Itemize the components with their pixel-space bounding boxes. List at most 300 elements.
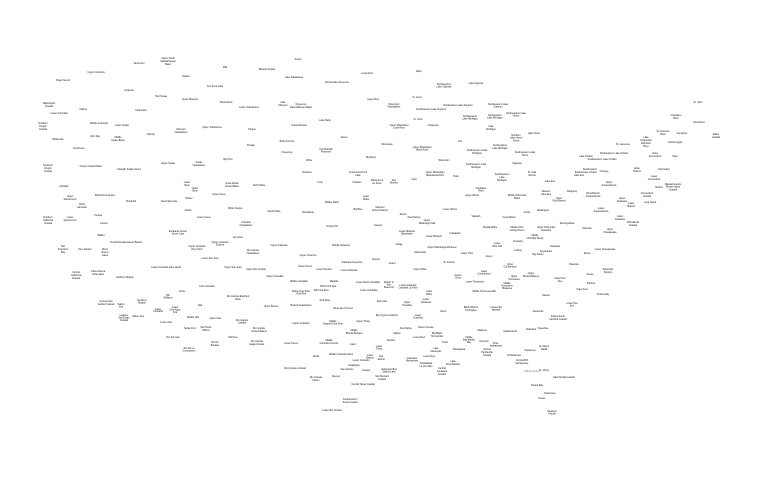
labels: Southwest: Salton <box>118 303 124 306</box>
labels: California and Great Basin: Lahontan <box>77 206 88 209</box>
labels: Ohio and Upper Mississippi valley: Osage <box>395 243 403 246</box>
labels: Great Plains north: Tongue <box>248 128 257 131</box>
labels: Central Plains and Rockies: Grand-Chariton <box>372 209 389 212</box>
labels: Pacific Northwest: Upper Columbia <box>87 71 105 74</box>
labels: Southeast: Mobile <box>465 336 473 339</box>
labels: Central Plains and Rockies: Arkansas-Keystone <box>342 261 363 264</box>
labels: Southwest: Fria <box>173 311 178 314</box>
labels: Texas and Red River: Llano <box>350 343 357 346</box>
labels: Great Plains north: Upper Red <box>367 98 379 101</box>
labels: Southeast: Tombigbee <box>465 309 478 312</box>
labels: Ohio and Upper Mississippi valley: Upper <box>507 263 513 266</box>
labels: Central Plains and Rockies: Upper San Juan <box>224 266 242 269</box>
labels: Southeast: Ochlockonee <box>507 354 522 357</box>
labels: Great Lakes: Superior <box>493 106 503 109</box>
labels: Ohio and Upper Mississippi valley: Kanawha <box>541 229 552 232</box>
labels: California and Great Basin: Upper Colorado <box>189 245 205 248</box>
labels: Southeast: Florida <box>548 412 556 415</box>
labels: Pacific Northwest: Headwaters <box>193 164 206 167</box>
labels: Southeast <box>419 290 575 415</box>
labels: Ohio and Upper Mississippi valley <box>395 171 568 290</box>
labels: Ohio and Upper Mississippi valley: Upper Illinois <box>465 194 480 197</box>
labels: Texas and Red River: Lower Rio Grande <box>322 409 342 412</box>
labels: Southeast: Alabama <box>477 329 487 332</box>
labels: Central Plains and Rockies <box>212 171 418 289</box>
labels: Pacific Northwest: Oregon <box>44 167 53 170</box>
labels: Pacific Northwest: Missouri <box>177 128 185 131</box>
labels: Northeast: Hudson <box>633 170 642 173</box>
labels: Ohio and Upper Mississippi valley: Upper <box>556 197 562 200</box>
labels: Southeast: Suwannee <box>524 349 536 352</box>
labels: Northeast: Lake Erie <box>574 174 585 177</box>
labels: Southeast: lapoosa <box>492 308 501 311</box>
labels: Texas and Red River: Galveston Bay <box>381 368 397 371</box>
labels: Northeast: Merrimack <box>658 168 670 171</box>
labels: Northeast: Coastal <box>643 195 652 198</box>
labels: Ohio and Upper Mississippi valley: Rock <box>453 175 460 178</box>
labels: Pacific Northwest: Marias <box>182 75 190 78</box>
labels: Great Lakes: Wisconsin <box>389 103 399 106</box>
labels: Southeast: Lower Red <box>423 355 435 358</box>
labels: Southeast: Choc- <box>493 342 499 345</box>
labels: Northeast: Chesapeake <box>603 231 617 234</box>
labels: Great Plains north: Big Sioux <box>366 156 377 159</box>
labels: Southwest: Mimbres <box>228 336 238 339</box>
labels: Southwest: Ventura-San <box>99 300 113 303</box>
labels: Central Plains and Rockies: Colorado <box>241 221 251 224</box>
labels: Southwest: Rio De <box>211 341 219 344</box>
labels: California and Great Basin: North <box>79 203 85 206</box>
labels: Pacific Northwest: Saskatchewan <box>160 60 176 63</box>
labels: Ohio and Upper Mississippi valley: Middle <box>503 282 511 285</box>
labels: Pacific Northwest: Basin <box>165 63 172 66</box>
labels: Great Plains north: Powder <box>247 144 255 147</box>
labels: Northeast: Penobscot <box>693 121 705 124</box>
labels: Texas and Red River: Ouachita <box>413 317 423 320</box>
labels: Northeast: Androscoggin <box>668 141 683 144</box>
labels: Texas and Red River: Middle <box>329 320 337 323</box>
labels: Great Lakes: Northeastern Lake Superior <box>443 104 473 107</box>
labels: Ohio and Upper Mississippi valley: Ohio-Salt <box>492 245 502 248</box>
labels: Northeast: Pamlico <box>587 282 596 285</box>
labels: Texas and Red River: Nueces <box>332 375 341 378</box>
labels: Great Lakes: St. Louis <box>412 96 422 99</box>
labels: Pacific Northwest: Hart Snake <box>155 95 168 98</box>
labels: Pacific Northwest: Middle Columbia <box>90 122 109 125</box>
labels: Ohio and Upper Mississippi valley: Lower Ohio <box>461 252 474 255</box>
labels: California and Great Basin: Carson <box>100 222 109 225</box>
labels: Southeast: Middle Tennessee-Elk <box>472 290 496 293</box>
labels: Ohio and Upper Mississippi valley: Lower <box>494 242 500 245</box>
labels: Southwest: Rio Grande <box>236 319 248 322</box>
labels: Great Plains north: Grand-Moreau <box>291 124 307 127</box>
labels: Northeast: Rhode Island <box>666 186 681 189</box>
labels: Great Lakes: Lake Huron <box>510 137 523 140</box>
labels: Central Plains and Rockies: Missouri-Lit <box>371 179 383 182</box>
labels: Central Plains and Rockies: Cottonwood Fork <box>349 171 367 174</box>
labels: Texas and Red River: Central Texas Coastal <box>351 383 375 386</box>
labels: Northeast: Connecticut <box>641 192 653 195</box>
labels: Northeast: St. Lawrence <box>616 143 631 146</box>
labels: Northeast: Lower <box>628 202 634 205</box>
labels: California and Great Basin: Weber <box>186 197 193 200</box>
labels: Pacific Northwest: Lower Snake <box>115 124 130 127</box>
labels: Ohio and Upper Mississippi valley: Lake <box>499 176 505 179</box>
labels: California and Great Basin: Lower San Juan <box>201 257 219 260</box>
labels: Pacific Northwest: Lower Columbia <box>50 112 68 115</box>
labels: Southwest <box>98 285 249 352</box>
labels: Great Lakes: Southeastern Lake <box>488 103 508 106</box>
labels: Southwest: Bavispe <box>211 344 220 347</box>
labels: Southeast: Coosa-Tal <box>491 306 501 309</box>
labels: Pacific Northwest <box>38 57 223 173</box>
labels: Northeast: Mid Atlantic <box>627 221 639 224</box>
labels: Southeast: Panhandle <box>481 351 493 354</box>
labels: Central Plains and Rockies: Lake <box>355 174 361 177</box>
labels: Pacific Northwest: Northern <box>38 122 48 125</box>
labels: Great Plains north: Fort Randall <box>319 148 333 151</box>
labels: Northeast: Hudson <box>655 186 664 189</box>
labels: Texas and Red River: San Antonio <box>341 368 354 371</box>
labels: Great Lakes: Huron <box>513 115 520 118</box>
labels: Ohio and Upper Mississippi valley: Iowa <box>411 178 417 181</box>
labels: California and Great Basin: Coastal <box>44 222 53 225</box>
labels: Ohio and Upper Mississippi valley: Maquoketa-Plum <box>426 174 444 177</box>
labels: Southwest: Coastal <box>120 319 129 322</box>
labels: Great Plains north: White <box>306 159 313 162</box>
labels: Great Lakes: Shore <box>513 139 520 142</box>
labels: Central Plains and Rockies: Upper Canadian <box>266 275 284 278</box>
labels: Central Plains and Rockies: Upper Rio Grande <box>246 268 266 271</box>
labels: Great Lakes: Northeastern Lake <box>506 112 526 115</box>
labels: Central Plains and Rockies: Washita <box>330 280 339 283</box>
labels: Northeast: Upper <box>652 152 658 155</box>
labels: Texas and Red River: Lower Colorado <box>353 359 370 362</box>
labels: Texas and Red River: Middle Colorado-Llano <box>329 353 354 356</box>
labels: Northeast: Susquehanna <box>594 210 609 213</box>
labels: Southwest: Southern <box>137 299 147 302</box>
labels: California and Great Basin: San Joaquin <box>78 248 92 251</box>
labels: Pacific Northwest: Oregon Closed Basin <box>80 165 103 168</box>
labels: Great Lakes: St. Croix <box>413 118 423 121</box>
labels: Great Plains north: Oahe-Missouri Basin <box>290 106 313 109</box>
labels: California and Great Basin: Central Nevada Desert Basins <box>110 241 143 244</box>
labels: Great Lakes: Lake <box>488 125 494 128</box>
labels: Pacific Northwest: Oregon <box>39 125 48 128</box>
labels: Texas and Red River: Lower Pecos <box>284 342 299 345</box>
labels: Great Plains north: Missouri <box>279 104 288 107</box>
labels: Pacific Northwest: Upper Yellowstone <box>202 126 223 129</box>
labels: Texas and Red River: North Fork Red <box>320 285 337 288</box>
labels: Ohio and Upper Mississippi valley: Kanawha <box>550 245 561 248</box>
labels: Southwest: Caballo <box>238 322 247 325</box>
labels: Southeast: Coastal <box>438 373 447 376</box>
labels: California and Great Basin: Lower <box>67 216 73 219</box>
labels: Northeast: Lower Chesapeake <box>595 248 616 251</box>
labels: Texas and Red River: Upper <box>404 301 410 304</box>
labels: California and Great Basin: Sacramento <box>64 219 77 222</box>
labels: California and Great Basin: Black Rock Desert <box>95 194 115 197</box>
labels: Texas and Red River: Colorado-Concho <box>320 342 339 345</box>
labels: Great Plains north: Lower Yellowstone <box>239 106 260 109</box>
labels: Central Plains and Rockies: North Platte <box>253 184 266 187</box>
labels: Central Plains and Rockies: Robert S. <box>384 281 394 284</box>
labels: Southeast: Withlacoochee <box>524 370 541 373</box>
labels: Great Lakes: Rainy <box>416 70 423 73</box>
labels: Central Plains and Rockies: Platte <box>363 198 370 201</box>
labels: Southeast: lachascotee <box>516 362 529 365</box>
labels: Ohio and Upper Mississippi valley: Upper Ohio-Little <box>537 226 555 229</box>
labels: Ohio and Upper Mississippi valley: Lake Erie <box>545 180 556 183</box>
labels: Southeast: Pearl <box>442 341 448 344</box>
labels: Great Plains north: Devils Lake-Sheyenne <box>325 81 350 84</box>
labels: California and Great Basin <box>43 181 227 280</box>
labels: Northeast: Cape Fear <box>576 288 588 291</box>
labels: Southwest: Williams <box>164 297 173 300</box>
labels: Southeast: Lake <box>433 347 439 350</box>
labels: Ohio and Upper Mississippi valley: Cumberland <box>477 272 491 275</box>
labels: Great Lakes: Lake Huron <box>528 132 541 135</box>
labels: Ohio and Upper Mississippi valley: Southwestern <box>495 173 509 176</box>
labels: Southwest: Santa Cruz <box>184 327 197 330</box>
labels: California and Great Basin: California <box>71 274 82 277</box>
labels: Southwest: Upper Gila <box>209 317 221 320</box>
labels: Central Plains and Rockies: Dolores <box>216 244 225 247</box>
labels: California and Great Basin: Jordan <box>184 209 192 212</box>
labels: Southwest: Middle Gila <box>187 316 200 319</box>
labels: Great Plains north: Lake Sakakawea <box>285 76 304 79</box>
labels: Southwest: Salton Sea <box>132 315 145 318</box>
labels: Southwest: Sea <box>119 306 124 309</box>
labels: California and Great Basin: Vista Lakes <box>92 273 105 276</box>
labels: Northeast: River <box>673 117 679 120</box>
labels: Great Lakes: Lake Michigan <box>487 117 503 120</box>
labels: Texas and Red River: Lower <box>415 314 421 317</box>
labels: Pacific Northwest: Coastal <box>45 105 54 108</box>
labels: Texas and Red River: Sabine <box>393 332 401 335</box>
labels: Southeast: Black Warrior <box>464 306 478 309</box>
labels: Southeast: Pontchartrain <box>446 363 461 366</box>
labels: Texas and Red River: Prairie Dog Town <box>292 290 310 293</box>
labels: Great Lakes: Lake Superior <box>469 82 484 85</box>
labels: Southwest: Bill <box>166 294 170 297</box>
labels: Ohio and Upper Mississippi valley: Licking <box>514 249 522 252</box>
labels: Central Plains and Rockies: Grand <box>389 262 396 265</box>
labels: Central Plains and Rockies: Upper Colorado <box>212 241 228 244</box>
labels: Great Lakes: Chippewa <box>428 124 439 127</box>
labels: Northeast: Upper <box>606 181 612 184</box>
labels: Great Lakes: Southwestern Lake <box>515 151 535 154</box>
labels: Ohio and Upper Mississippi valley: Tennessee <box>508 278 520 281</box>
labels: California and Great Basin: Francisco <box>58 248 69 251</box>
labels: Central Plains and Rockies: Lower Neosho <box>316 268 332 271</box>
labels: Southeast: Yazoo <box>440 310 447 313</box>
labels: California and Great Basin: Lower Green <box>197 216 212 219</box>
labels: Texas and Red River: Texas Coastal <box>342 401 358 404</box>
labels: Central Plains and Rockies: Neosho <box>372 258 381 261</box>
labels: Southeast: Apalachicola <box>503 330 517 333</box>
labels: Ohio and Upper Mississippi valley: Gasconade <box>414 251 427 254</box>
labels: Texas and Red River: Middle <box>325 339 333 342</box>
labels: Northeast: Delaware <box>617 200 628 203</box>
labels: Southeast: Lake <box>450 360 456 363</box>
labels: Northeast: Pamlico <box>604 271 613 274</box>
labels: Northeast <box>554 101 721 307</box>
labels: Ohio and Upper Mississippi valley: Broad-Wateree <box>523 275 540 278</box>
labels: Central Plains and Rockies: Middle Platte <box>325 201 340 204</box>
labels: Texas and Red River: Salt Fork Red <box>314 289 329 292</box>
labels: Texas and Red River: Rio Grande <box>251 340 263 343</box>
labels: Texas and Red River: Lower <box>376 345 382 348</box>
labels: Southwest: San Pedro <box>200 326 212 329</box>
labels: Central Plains and Rockies: Upper Pecos <box>298 265 313 268</box>
labels: Southeast: Bayou Tensas <box>419 326 434 329</box>
labels: Southeast: Bay-Mobile <box>463 338 476 341</box>
labels: Southwest: Verde <box>179 290 186 293</box>
labels: California and Great Basin: Northern <box>43 216 53 219</box>
labels: Northeast: Chaudiere <box>670 114 682 117</box>
labels: Texas and Red River: Lavaca <box>362 369 371 372</box>
labels: Ohio and Upper Mississippi valley: Western <box>542 190 550 193</box>
labels: Ohio and Upper Mississippi valley: Middle Ohio <box>511 226 523 229</box>
labels: Northeast: River <box>660 133 666 136</box>
labels: Pacific Northwest: Vancouver <box>133 62 145 65</box>
labels: Northeast: Champlain <box>640 139 652 142</box>
labels: California and Great Basin: Great Salt Lake <box>161 200 178 203</box>
labels: Southwest: Gabriel Coastal <box>98 303 115 306</box>
labels: Great Plains north: Missouri-Poplar <box>259 68 276 71</box>
labels: Southeast: Big Black <box>432 332 442 335</box>
labels: Ohio and Upper Mississippi valley: Kaskaskia <box>450 232 461 235</box>
labels: Northeast: Maine <box>713 133 719 136</box>
labels: California and Great Basin: Sevier Lake <box>172 233 185 236</box>
labels: Central Plains and Rockies: Rio Grande <box>247 249 259 252</box>
labels: Ohio and Upper Mississippi valley: Middle Ohio-Little <box>508 194 526 197</box>
labels: Texas and Red River: Brazos-Bosque <box>346 332 363 335</box>
labels: Ohio and Upper Mississippi valley: Ohio-Beaver <box>552 199 566 202</box>
labels: Southeast: Ogeechee <box>537 327 549 330</box>
labels: Great Plains north <box>207 58 393 162</box>
labels: Southeast: La Vermilion <box>419 365 433 368</box>
labels: Great Plains north: Reservoir <box>321 151 331 154</box>
labels: Southeast: Conecuh <box>479 340 489 343</box>
labels: California and Great Basin: California <box>43 219 54 222</box>
labels: Southeast: Homochitto <box>431 335 444 338</box>
labels: Southwest: Willcox <box>202 329 211 332</box>
labels: California and Great Basin: Bay <box>61 251 66 254</box>
labels: Central Plains and Rockies: Gunnison <box>233 236 244 239</box>
labels: Southwest: Little Colorado <box>199 285 215 288</box>
labels: Central Plains and Rockies: Republican <box>302 211 315 214</box>
labels: Central Plains and Rockies: Lower <box>363 195 369 198</box>
labels: Ohio and Upper Mississippi valley: Kankakee <box>476 187 486 190</box>
labels: Southwest: Gila-Agua <box>170 309 181 312</box>
labels: Great Lakes: Lake Michigan <box>462 118 478 121</box>
labels: Great Lakes: Southeastern <box>493 144 507 147</box>
labels: Ohio and Upper Mississippi valley: Upper Mississippi-Meramec <box>427 246 458 249</box>
labels: Texas and Red River: Red-Lake Texoma <box>333 307 353 310</box>
labels: Ohio and Upper Mississippi valley: St. Clair <box>528 171 536 174</box>
labels: Great Lakes: Fox <box>458 140 463 143</box>
labels: Texas and Red River: Coastal <box>378 378 387 381</box>
labels: Pacific Northwest: Coastal <box>44 170 53 173</box>
labels: Northeast: Upper <box>619 197 625 200</box>
labels: Northeast: Susquehanna <box>586 195 601 198</box>
labels: Great Lakes: Michigan <box>471 166 481 169</box>
labels: California and Great Basin: Lower Colorado-Lake Mead <box>151 266 181 269</box>
labels: Northeast: Oswego <box>600 170 609 173</box>
labels: Northeast: Upper <box>607 228 613 231</box>
labels: Central Plains and Rockies: tle Sioux <box>372 182 382 185</box>
labels: Southwest: Laguna- <box>120 314 128 317</box>
labels: Central Plains and Rockies: Missouri <box>376 206 384 209</box>
labels: Central Plains and Rockies: South Platte <box>267 210 281 213</box>
labels: Great Lakes: Southwestern Lake Superior <box>416 108 446 111</box>
labels: Central Plains and Rockies: Middle Canadian <box>290 280 309 283</box>
labels: Central Plains and Rockies: Closed Basin <box>225 185 240 188</box>
labels: Texas and Red River: Lower <box>367 354 373 357</box>
labels: Great Lakes: Upper Mississippi <box>390 124 408 127</box>
labels: Ohio and Upper Mississippi valley: Great Miami <box>502 216 516 219</box>
labels: Ohio and Upper Mississippi valley: Detroit <box>528 174 536 177</box>
labels: Pacific Northwest: Middle <box>114 136 122 139</box>
labels: Great Lakes: Black-Root <box>416 149 428 152</box>
labels: Northeast: West Branch <box>586 192 600 195</box>
labels: Ohio and Upper Mississippi valley: Scioto <box>524 211 531 214</box>
labels: Great Lakes: Lake Superior <box>437 86 452 89</box>
labels: Pacific Northwest: Clearwater <box>135 109 147 112</box>
labels: California and Great Basin: Escalante Desert <box>169 230 187 233</box>
labels: California and Great Basin: Owens <box>101 251 110 254</box>
labels: Southwest: Concepcion <box>183 350 196 353</box>
labels: Southwest: Mojave <box>138 302 147 305</box>
labels: Texas and Red River <box>227 285 425 412</box>
labels: Southeast: Carolina Coastal <box>549 318 567 321</box>
labels: Pacific Northwest: Upper Missouri <box>182 98 199 101</box>
labels: Pacific Northwest: Snake-Boise <box>111 139 125 142</box>
labels: Central Plains and Rockies: Lower Arkansas <box>340 269 358 272</box>
labels: Ohio and Upper Mississippi valley: Tennessee <box>501 284 513 287</box>
labels: Central Plains and Rockies: Middle Arkansas <box>332 244 351 247</box>
labels: Northeast: Lower <box>598 207 604 210</box>
labels: Great Lakes: Southwestern Lake <box>467 149 487 152</box>
labels: Great Lakes: Michigan <box>486 128 496 131</box>
labels: Texas and Red River: Red River <box>320 299 331 302</box>
labels: Ohio and Upper Mississippi valley: St. Francis <box>443 261 456 264</box>
labels: Pacific Northwest: Puget Sound <box>56 79 71 82</box>
labels: California and Great Basin: Klamath <box>60 185 69 188</box>
labels: Northeast: Connecticut <box>649 155 662 158</box>
labels: Texas and Red River: Southwestern <box>343 398 357 401</box>
labels: Northeast: St. Francois <box>657 130 669 133</box>
labels: California and Great Basin: Bear <box>192 190 198 193</box>
labels: Northeast: Monongahela <box>560 222 575 225</box>
labels: Texas and Red River: Butte <box>235 298 241 301</box>
labels: California and Great Basin: Upper <box>192 187 198 190</box>
labels: Northeast: Albemarle <box>603 268 613 271</box>
labels: Southeast: Coastal <box>483 354 492 357</box>
labels: Central Plains and Rockies: Headwaters <box>247 252 260 255</box>
labels: California and Great Basin: Lakes <box>102 254 109 257</box>
labels: California and Great Basin: Upper Green <box>212 193 227 196</box>
labels: Southeast: Kissimmee <box>544 392 557 395</box>
labels: Central Plains and Rockies: Upper Cimarron <box>299 254 317 257</box>
labels: Great Lakes: Headwaters <box>388 106 401 109</box>
labels: Texas and Red River: Guadalupe <box>348 364 361 367</box>
labels: Northeast: Northeastern Lake Ontario <box>600 152 629 155</box>
labels: Southeast: Maurepas <box>431 350 442 353</box>
labels: Southeast: Bay <box>467 341 472 344</box>
